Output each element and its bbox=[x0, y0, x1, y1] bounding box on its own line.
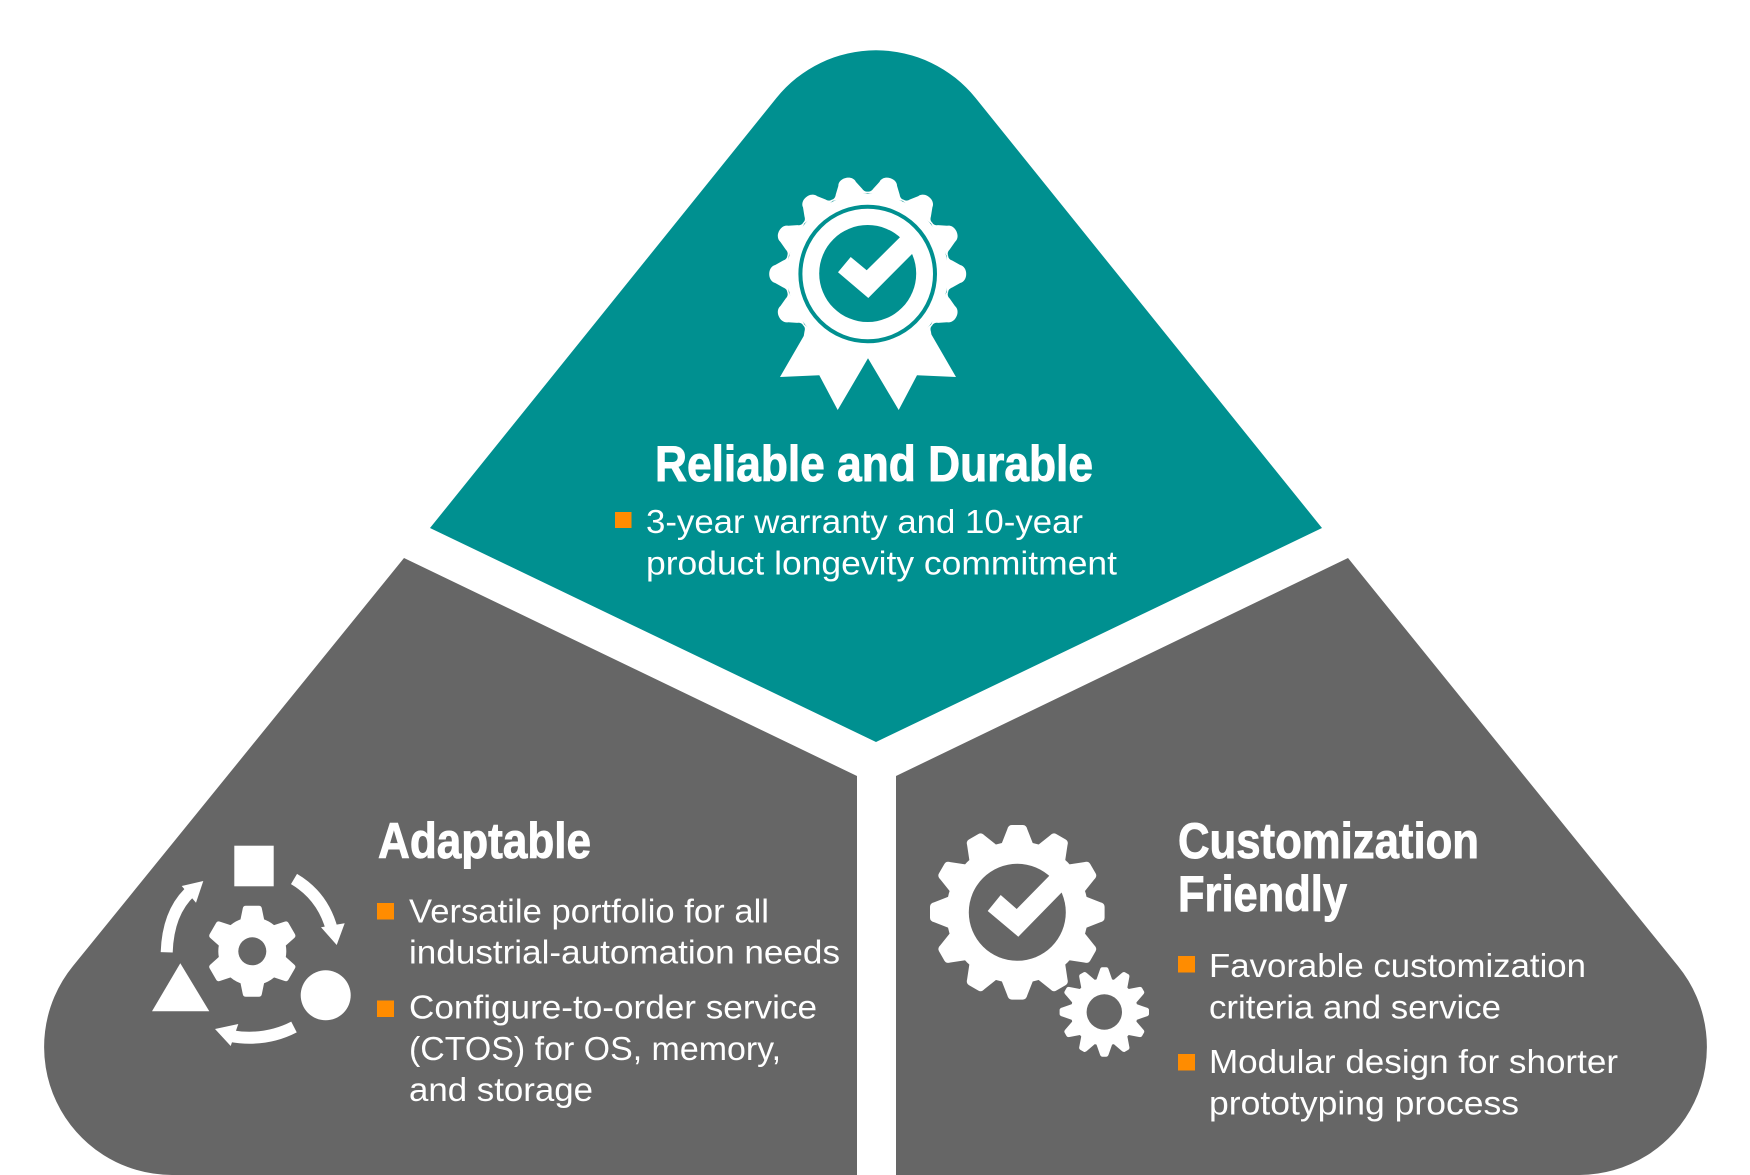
bullet: customization criteria: Favorable customization bbox=[1209, 947, 1586, 984]
panel shape: teal rounded triangle bbox=[430, 50, 1322, 742]
bullet: versatile portfolio: industrial-automation needs bbox=[409, 934, 840, 970]
bullet: modular design bbox=[1178, 1043, 1618, 1122]
panel: Reliable and Durable bbox=[430, 50, 1322, 742]
bullet: versatile portfolio: Versatile portfolio for all bbox=[409, 892, 769, 930]
panel shape: gray rounded wedge, left bbox=[44, 558, 857, 1175]
heading: Customization Friendly bbox=[1178, 813, 1479, 922]
bullet: configure-to-order service: (CTOS) for OS, memory, bbox=[409, 1030, 781, 1067]
bullet: configure-to-order service: Configure-to-order service bbox=[409, 988, 817, 1026]
bullet: modular design: prototyping process bbox=[1209, 1084, 1519, 1122]
panel: Adaptable bbox=[44, 558, 857, 1175]
heading: Customization Friendly: Friendly bbox=[1178, 866, 1347, 922]
icon: shapes cycling around a gear bbox=[152, 846, 351, 1046]
bullet: warranty and longevity: product longevity commitment bbox=[646, 544, 1117, 582]
panel shape: gray rounded wedge, right bbox=[896, 558, 1707, 1175]
icon: award ribbon badge with check mark bbox=[769, 174, 966, 410]
icon: two gears with check mark bbox=[930, 825, 1149, 1057]
heading: Reliable and Durable: Reliable and Durable bbox=[655, 436, 1093, 492]
bullet: versatile portfolio bbox=[377, 892, 840, 970]
bullet: warranty and longevity bbox=[615, 503, 1117, 582]
bullet: modular design: Modular design for shorter bbox=[1209, 1043, 1618, 1080]
bullet: configure-to-order service: and storage bbox=[409, 1071, 593, 1108]
panel: Customization Friendly bbox=[896, 558, 1707, 1175]
heading: Adaptable: Adaptable bbox=[378, 813, 591, 869]
bullet: warranty and longevity: 3-year warranty and 10-year bbox=[646, 503, 1083, 540]
bullet: configure-to-order service bbox=[377, 988, 817, 1108]
bullet: customization criteria: criteria and service bbox=[1209, 988, 1501, 1026]
bullet: customization criteria bbox=[1178, 947, 1586, 1026]
heading: Customization Friendly: Customization bbox=[1178, 813, 1479, 869]
